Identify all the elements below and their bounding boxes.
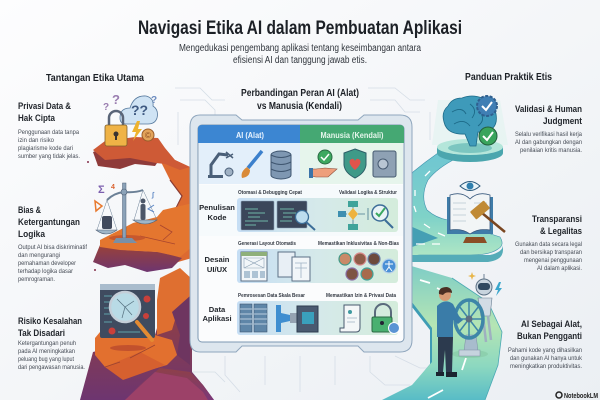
icon: buggy code window bbox=[100, 284, 155, 340]
guidance: ai sebagai alat: dan gunakan AI hanya untuk bbox=[510, 356, 583, 362]
challenge: risiko: dari pengawasan manusia. bbox=[18, 365, 85, 371]
guidance: validasi: penilaian kritis manusia. bbox=[520, 148, 582, 154]
icons row bbox=[199, 143, 403, 184]
icon: scales bbox=[95, 183, 157, 243]
subtitle bbox=[179, 43, 421, 66]
header: manusia bbox=[300, 125, 404, 143]
challenge: bias: Bias & bbox=[18, 205, 41, 215]
row: penulisan kode: Penulisan bbox=[199, 203, 235, 212]
guidance: ai sebagai alat bbox=[508, 319, 583, 370]
guidance: transparansi: mengenai penggunaan bbox=[524, 258, 582, 264]
guidance: validasi: Judgment bbox=[543, 116, 582, 126]
challenge: privasi data: izin dan risiko bbox=[18, 138, 55, 144]
challenge: privasi data bbox=[18, 101, 80, 160]
icon: lock, cloud and copyright: ? bbox=[151, 95, 157, 106]
guidance: ai sebagai alat: Pahami kode yang dihasilkan bbox=[508, 348, 582, 354]
row: desain ui/ux: Desain bbox=[205, 255, 230, 264]
challenge: bias: dan mengurangi bbox=[18, 253, 60, 259]
row: penulisan kode: Otomasi & Debugging Cepat bbox=[238, 190, 302, 196]
challenge: privasi data: plagiarisme kode dari bbox=[18, 146, 73, 152]
icon: eye, book and gavel bbox=[447, 182, 505, 243]
comparison heading: Perbandingan Peran AI (Alat) bbox=[241, 88, 359, 99]
row: penulisan kode: Kode bbox=[208, 213, 226, 222]
guidance: transparansi: Gunakan data secara legal bbox=[515, 242, 582, 248]
challenge: privasi data: Hak Cipta bbox=[18, 113, 56, 123]
guidance: validasi: AI dan gabungkan dengan bbox=[515, 140, 582, 146]
icon: lock, cloud and copyright: © bbox=[145, 131, 151, 140]
challenge: risiko: Tak Disadari bbox=[18, 328, 65, 338]
row: penulisan kode: Validasi Logika & Struktur bbox=[339, 190, 398, 196]
cliff path bbox=[80, 137, 214, 400]
subtitle: Mengedukasi pengembang aplikasi tentang keseimbangan antara bbox=[179, 43, 421, 54]
row: desain ui/ux: Generasi Layout Otomatis bbox=[238, 241, 296, 247]
icon: lock, cloud and copyright bbox=[103, 92, 158, 146]
challenge: privasi data: Penggunaan data tanpa bbox=[18, 130, 80, 136]
row: desain ui/ux: UI/UX bbox=[207, 265, 227, 274]
row: data aplikasi: Pemrosesan Data Skala Besar bbox=[238, 293, 306, 299]
challenge: bias: terhadap logika dasar bbox=[18, 269, 73, 275]
challenge: risiko: Risiko Kesalahan bbox=[18, 316, 82, 326]
row: data aplikasi: Memastikan Izin & Privasi Data bbox=[326, 293, 397, 299]
logo: notebooklm bbox=[556, 392, 598, 400]
guidance: validasi: Selalu verifikasi hasil kerja bbox=[515, 132, 583, 138]
challenge: bias: Logika bbox=[18, 229, 46, 239]
row: data aplikasi bbox=[202, 293, 400, 335]
row: desain ui/ux: Memastikan Inklusivitas & Non-Bias bbox=[318, 241, 399, 247]
icon: scales: Σ bbox=[98, 184, 105, 196]
header: AI: AI (Alat) bbox=[236, 131, 264, 140]
heading: panduan: Panduan Praktik Etis bbox=[465, 72, 552, 83]
icon: lock, cloud and copyright: ? bbox=[103, 102, 109, 113]
guidance: ai sebagai alat: meningkatkan produktivitas. bbox=[510, 364, 582, 370]
heading: tantangan: Tantangan Etika Utama bbox=[46, 73, 144, 84]
challenge: bias: pemrograman. bbox=[18, 277, 55, 283]
subtitle: efisiensi AI dan tanggung jawab etis. bbox=[233, 55, 367, 66]
icon: lock, cloud and copyright: ?? bbox=[131, 102, 148, 118]
road bbox=[380, 153, 503, 400]
comparison heading: vs Manusia (Kendali) bbox=[257, 101, 342, 112]
challenge: privasi data: Privasi Data & bbox=[18, 101, 71, 111]
guidance: ai sebagai alat: Bukan Pengganti bbox=[517, 331, 582, 341]
guidance: transparansi bbox=[515, 214, 582, 272]
challenge: bias bbox=[18, 205, 87, 283]
row: desain ui/ux bbox=[205, 241, 399, 283]
header: manusia: Manusia (Kendali) bbox=[320, 131, 384, 140]
icon: brain on platform bbox=[432, 96, 508, 162]
challenge: risiko: pada AI meningkatkan bbox=[18, 349, 75, 355]
icon: robot and person steering bbox=[436, 272, 502, 377]
guidance: transparansi: & Legalitas bbox=[540, 226, 582, 236]
challenge: bias: Output AI bisa diskriminatif bbox=[18, 245, 87, 251]
guidance: transparansi: Transparansi bbox=[532, 214, 582, 224]
challenge: privasi data: sumber yang tidak jelas. bbox=[18, 154, 80, 160]
challenge: bias: Ketergantungan bbox=[18, 217, 80, 227]
challenge: risiko: peluang bug yang luput bbox=[18, 357, 74, 363]
guidance: ai sebagai alat: AI Sebagai Alat, bbox=[521, 319, 582, 329]
challenge: bias: pemahaman developer bbox=[18, 261, 76, 267]
panel: comparison bbox=[190, 115, 412, 352]
title: Navigasi Etika AI dalam Pembuatan Aplikasi bbox=[138, 18, 462, 39]
icon: scales: 4 bbox=[111, 184, 115, 191]
guidance: validasi: Validasi & Human bbox=[515, 104, 582, 114]
guidance: validasi bbox=[515, 104, 583, 154]
comparison heading bbox=[241, 88, 359, 112]
icon: lock, cloud and copyright: ? bbox=[112, 92, 120, 107]
challenge: risiko bbox=[18, 316, 85, 371]
icon: scales: ∫ bbox=[151, 192, 155, 199]
challenge: risiko: Ketergantungan penuh bbox=[18, 341, 76, 347]
header: AI bbox=[198, 125, 300, 143]
guidance: transparansi: AI dalam aplikasi. bbox=[537, 266, 582, 272]
row: penulisan kode bbox=[199, 185, 403, 236]
row: data aplikasi: Data bbox=[209, 305, 226, 314]
row: data aplikasi: Aplikasi bbox=[202, 314, 232, 323]
guidance: transparansi: dan bersikap transparan bbox=[520, 250, 582, 256]
